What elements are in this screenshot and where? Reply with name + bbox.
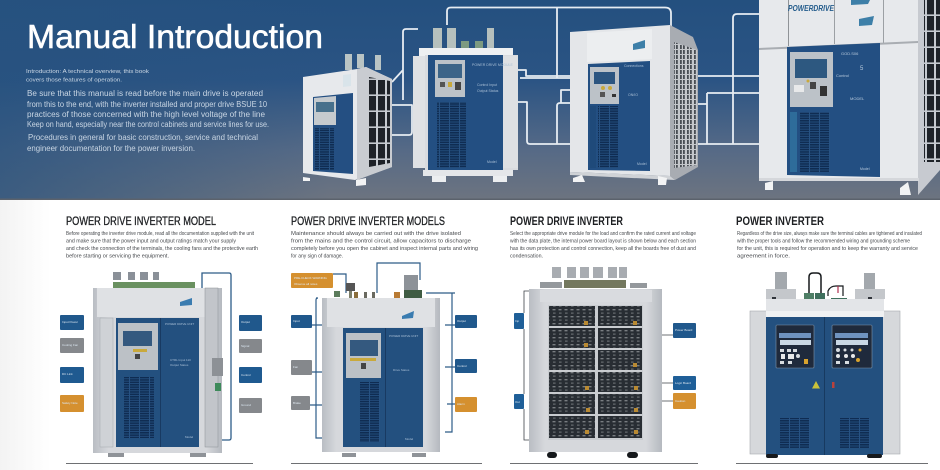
panel 1 blue door <box>116 318 199 447</box>
unit 2 control panel <box>435 60 465 97</box>
panel 1 description <box>66 231 258 260</box>
title: Manual Introduction <box>27 18 323 55</box>
unit 3: medium inverter: ON/IO <box>628 93 638 97</box>
header banner background <box>0 0 940 200</box>
panel 3 cables <box>524 291 673 440</box>
panel 4 feet <box>766 454 882 458</box>
panel 2 cabinet <box>322 298 440 452</box>
panel 4 right control display <box>832 325 872 368</box>
panel 2 callouts <box>291 273 477 412</box>
unit 1 top terminals <box>345 54 381 70</box>
panel 4 heading: POWER INVERTER <box>736 216 825 228</box>
panel 1 cable loop <box>202 273 231 440</box>
panel 2 description <box>291 231 478 260</box>
panel 2 cable routes <box>310 263 455 438</box>
panel 2 callouts: Input <box>293 319 300 323</box>
panel 3 description: has its own protection and control connection, keep all the boards free of dust and <box>510 246 696 252</box>
panel 3 callouts: Logic Board <box>675 381 691 385</box>
panel 3 callouts: Inp <box>515 319 520 323</box>
intro text block: Keep on hand, especially near the control cabinets and service lines for use. <box>27 120 269 129</box>
panel 2 callouts: Observe all notes <box>294 282 318 286</box>
panel 3 description: with the data plate, the internal power board layout is shown below and each section <box>509 238 696 244</box>
unit 3 blue panel <box>588 61 650 171</box>
panel 1 callouts <box>60 315 262 413</box>
panel 1 callouts: Cooling Fan <box>62 343 79 347</box>
unit 2 blue panel <box>428 55 503 170</box>
panel 3 description: condensation. <box>510 254 543 260</box>
unit 4 grille <box>924 0 940 162</box>
panel 4 red indicator <box>832 382 834 388</box>
panel 2 heading: POWER DRIVE INVERTER MODELS <box>291 216 445 228</box>
unit 2: tall inverter: Model <box>487 160 497 164</box>
panel 4 vents <box>780 418 870 448</box>
unit 1 blue panel <box>313 93 353 174</box>
panel 1 callouts: Safety Note <box>62 401 78 405</box>
panel 4 description: for the unit, this is required for operation and to keep the warranty and service <box>737 246 918 252</box>
panel 2: power drive inverter models <box>291 216 482 464</box>
panel 1 callouts: Control <box>241 373 251 377</box>
panel 1 callouts: Input Power <box>62 320 78 324</box>
intro text block: Be sure that this manual is read before the main drive is operated <box>27 89 263 98</box>
panel 1: power drive inverter model <box>60 216 262 464</box>
panel 4 description <box>736 231 922 260</box>
panel 3 cabinet <box>529 289 662 452</box>
unit 2: tall inverter: Control Input <box>477 83 497 87</box>
panel 4 divider <box>736 463 928 464</box>
unit 4: large inverter cropped at right: Model <box>860 167 870 171</box>
unit 1: small outdoor inverter <box>303 54 392 186</box>
panel 1 callouts: DC Link <box>62 372 73 376</box>
panel 4 blue doors <box>766 317 883 455</box>
panel 1 description: before starting or servicing the equipment. <box>66 254 169 260</box>
panel 2 callouts: Control <box>457 364 467 368</box>
panel 1 description: and check the connection of the terminals, the cooling fans and the protective earth <box>66 246 258 252</box>
panel 1 callouts: Ground <box>241 403 251 407</box>
panel 1: power drive inverter model: Model <box>185 435 194 439</box>
panel 3 callouts: Out <box>515 400 520 404</box>
panel 2 callouts: Fan <box>293 365 299 369</box>
unit 4 blue panel <box>787 43 880 177</box>
panel 1 heading: POWER DRIVE INVERTER MODEL <box>66 216 216 228</box>
panel 3 divider <box>510 463 698 464</box>
unit 3 control panel <box>590 67 619 104</box>
panel 2 divider <box>291 463 482 464</box>
panel 1 control panel <box>118 323 158 370</box>
panel 2 blue door <box>343 328 423 447</box>
panel 3 callouts: Power Board <box>675 328 693 332</box>
lower section background <box>0 200 940 470</box>
panel 1: power drive inverter model: CTRL Input 110 <box>170 358 191 362</box>
panel 4 left control display <box>776 325 814 368</box>
panel 4 top terminals and wiring <box>766 272 885 304</box>
panel 1: power drive inverter model: Output Status <box>170 363 189 367</box>
panel 4 cabinet sides <box>750 311 900 454</box>
unit 4 logo <box>788 0 874 26</box>
panel 4 warning icon <box>812 381 820 388</box>
unit 3: medium inverter <box>570 25 698 185</box>
panel 1 description: Before operating the inverter drive module, read all the documentation supplied with the unit <box>66 231 254 237</box>
panel 3 callouts: Caution <box>675 399 686 403</box>
panel 3 heading: POWER DRIVE INVERTER <box>510 216 624 228</box>
panel 1 callouts: Output <box>241 320 250 324</box>
panel 2 callouts: PRE-CHECK WARNING <box>294 276 328 280</box>
panel 1 divider <box>66 463 253 464</box>
panel 1: power drive inverter model: POWER DRIVE UNIT <box>165 322 194 326</box>
panel 2 callouts: Brake <box>293 401 301 405</box>
unit 4: large inverter cropped at right: 5 <box>860 66 864 72</box>
panel 1 top connectors <box>113 272 195 288</box>
unit 4 logo: POWERDRIVE <box>788 4 835 13</box>
intro text block: Introduction: A technical overview, this book <box>26 69 149 75</box>
intro text block: Procedures in general for basic construction, service and technical <box>28 133 258 142</box>
panel 4 description: agreement in force. <box>737 254 790 260</box>
panel 4: power inverter <box>736 216 928 464</box>
panel 2 control panel <box>346 333 381 378</box>
unit 4: large inverter cropped at right: MODEL <box>850 96 865 101</box>
panel 1 description: and make sure that the power input and output ratings match your supply <box>66 238 236 244</box>
panel 3 description <box>509 231 696 260</box>
panel 2 description: from the mains and the control circuit, allow capacitors to discharge <box>291 238 471 244</box>
intro text block: covers those features of operation. <box>26 78 122 84</box>
panel 2 callouts: Alarm <box>457 402 465 406</box>
intro text block: from this to the end, with the inverter installed and proper drive BSUE 10 <box>27 100 268 109</box>
panel 3 top connectors <box>540 267 647 288</box>
unit 1 grille <box>369 77 390 167</box>
unit 3 side mesh <box>670 25 698 180</box>
white pipes connecting units <box>392 8 759 144</box>
unit 2: tall inverter: Output Status <box>477 89 499 93</box>
unit 4: large inverter cropped at right: Control <box>836 73 849 78</box>
panel 3: power drive inverter <box>509 216 698 464</box>
intro text block: practices of those concerned with the high level voltage of the line <box>27 110 266 119</box>
panel 2: power drive inverter models: POWER DRIVE UNIT <box>389 334 418 338</box>
unit 2: tall inverter: POWER DRIVE MODULE <box>472 63 514 67</box>
panel 1 callouts: Signal <box>241 344 250 348</box>
panel 3 callouts <box>514 313 696 409</box>
panel 2 description: completely before you open the cabinet and inspect internal parts and wiring <box>291 246 478 252</box>
panel 2: power drive inverter models: Drive Status <box>393 368 410 372</box>
panel 2 description: Maintenance should always be carried out with the drive isolated <box>291 231 461 237</box>
panel 2 vents <box>360 382 380 442</box>
unit 4: large inverter cropped at right: GOD.S06 <box>841 51 859 56</box>
intro text block <box>26 69 269 153</box>
panel 2 description: for any sign of damage. <box>291 254 343 260</box>
unit 4 control panel <box>790 52 833 107</box>
unit 3: medium inverter: Connections <box>624 64 644 68</box>
panel 2 top connectors <box>334 275 422 298</box>
panel 3 description: Select the appropriate drive module for the load and confirm the rated current and voltage <box>510 231 696 237</box>
panel 4 description: with the proper tools and follow the recommended wiring and grounding scheme <box>736 238 910 244</box>
panel 2 callouts: Output <box>457 319 466 323</box>
panel 1 cabinet <box>93 288 222 453</box>
panel 1 vents <box>124 377 154 438</box>
panel 2: power drive inverter models: Model <box>405 437 414 441</box>
intro text block: engineer documentation for the power inversion. <box>27 144 195 153</box>
panel 3 circuit boards <box>548 305 643 440</box>
unit 4: large inverter cropped at right <box>759 0 940 195</box>
unit 2 top terminals <box>433 28 494 48</box>
unit 2: tall inverter <box>413 28 518 182</box>
unit 3: medium inverter: Model <box>637 162 647 166</box>
